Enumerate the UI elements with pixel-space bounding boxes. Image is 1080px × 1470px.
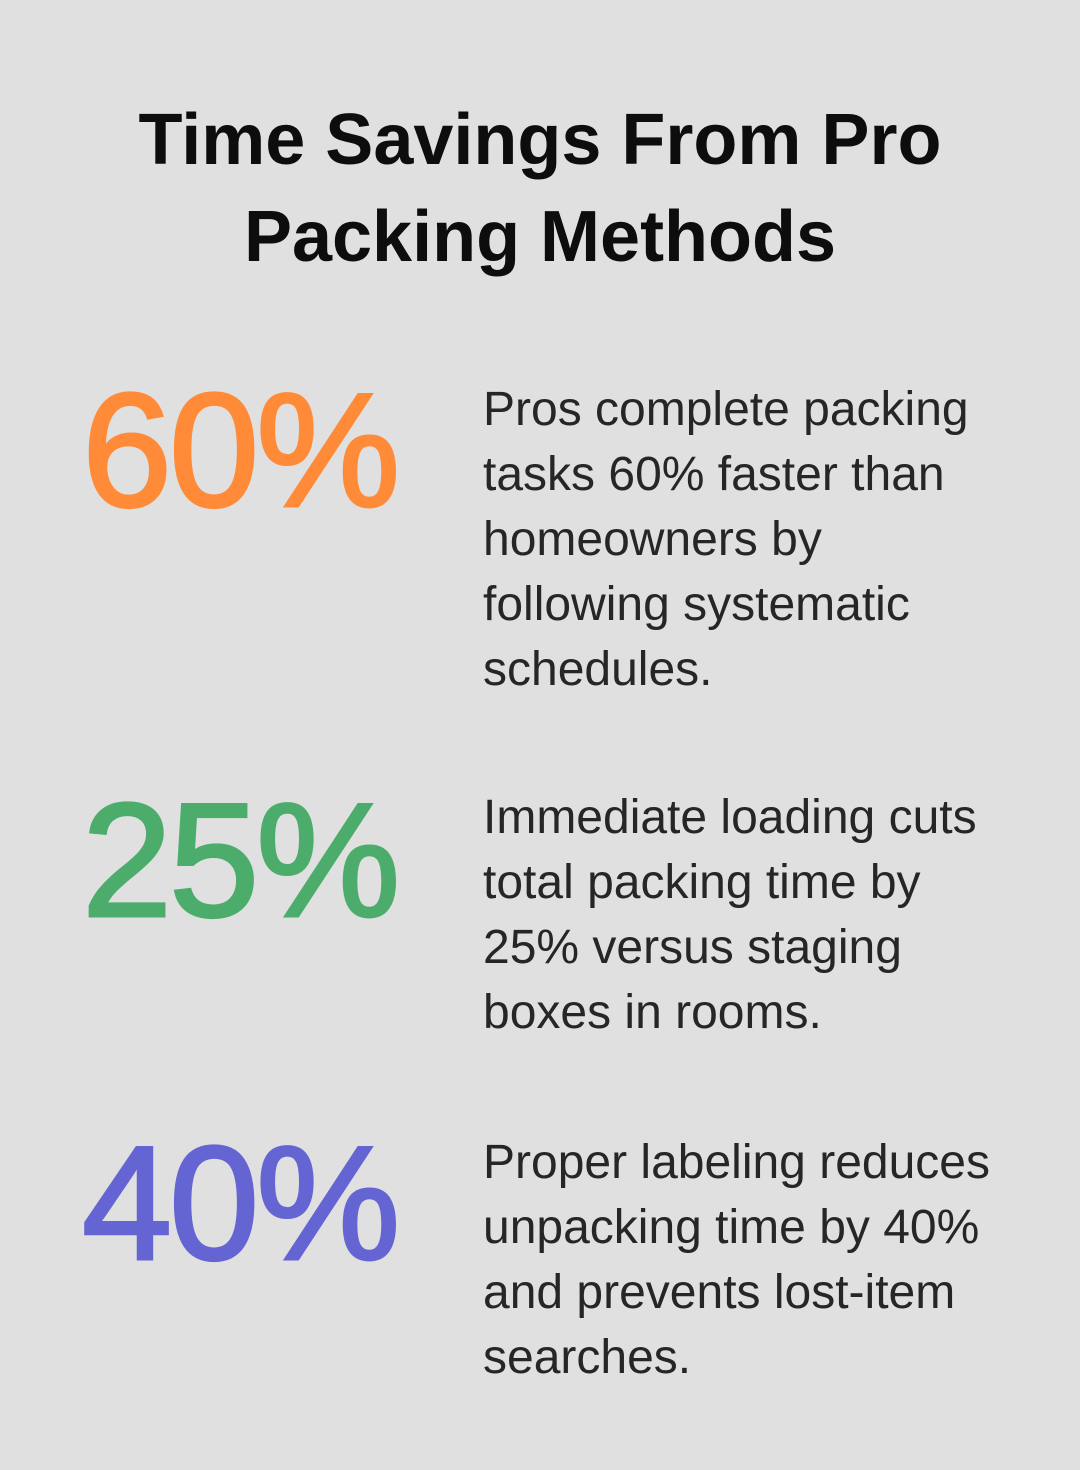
text: 25% description: 25% versus staging: [483, 921, 902, 974]
stat: 40%: 40%: [82, 1113, 397, 1294]
title: Time Savings From Pro: [139, 100, 941, 180]
text: 60% description: tasks 60% faster than: [483, 448, 945, 501]
text: 40% description: Proper labeling reduces: [483, 1136, 990, 1189]
text: 40% description: [483, 1136, 990, 1384]
text: 60% description: schedules.: [483, 643, 712, 696]
title: [139, 100, 941, 277]
stat: 60%: 60%: [82, 360, 397, 541]
text: 40% description: searches.: [483, 1331, 691, 1384]
text: 25% description: total packing time by: [483, 856, 921, 909]
text: 60% description: [483, 383, 969, 696]
text: 25% description: Immediate loading cuts: [483, 791, 977, 844]
text: 60% description: following systematic: [483, 578, 910, 631]
text: 40% description: unpacking time by 40%: [483, 1201, 979, 1254]
text: 25% description: boxes in rooms.: [483, 986, 822, 1039]
text: 60% description: Pros complete packing: [483, 383, 969, 436]
text: 60% description: homeowners by: [483, 513, 822, 566]
text: 40% description: and prevents lost-item: [483, 1266, 955, 1319]
text: 25% description: [483, 791, 977, 1039]
stat: 25%: 25%: [82, 770, 397, 951]
title: Packing Methods: [244, 197, 836, 277]
